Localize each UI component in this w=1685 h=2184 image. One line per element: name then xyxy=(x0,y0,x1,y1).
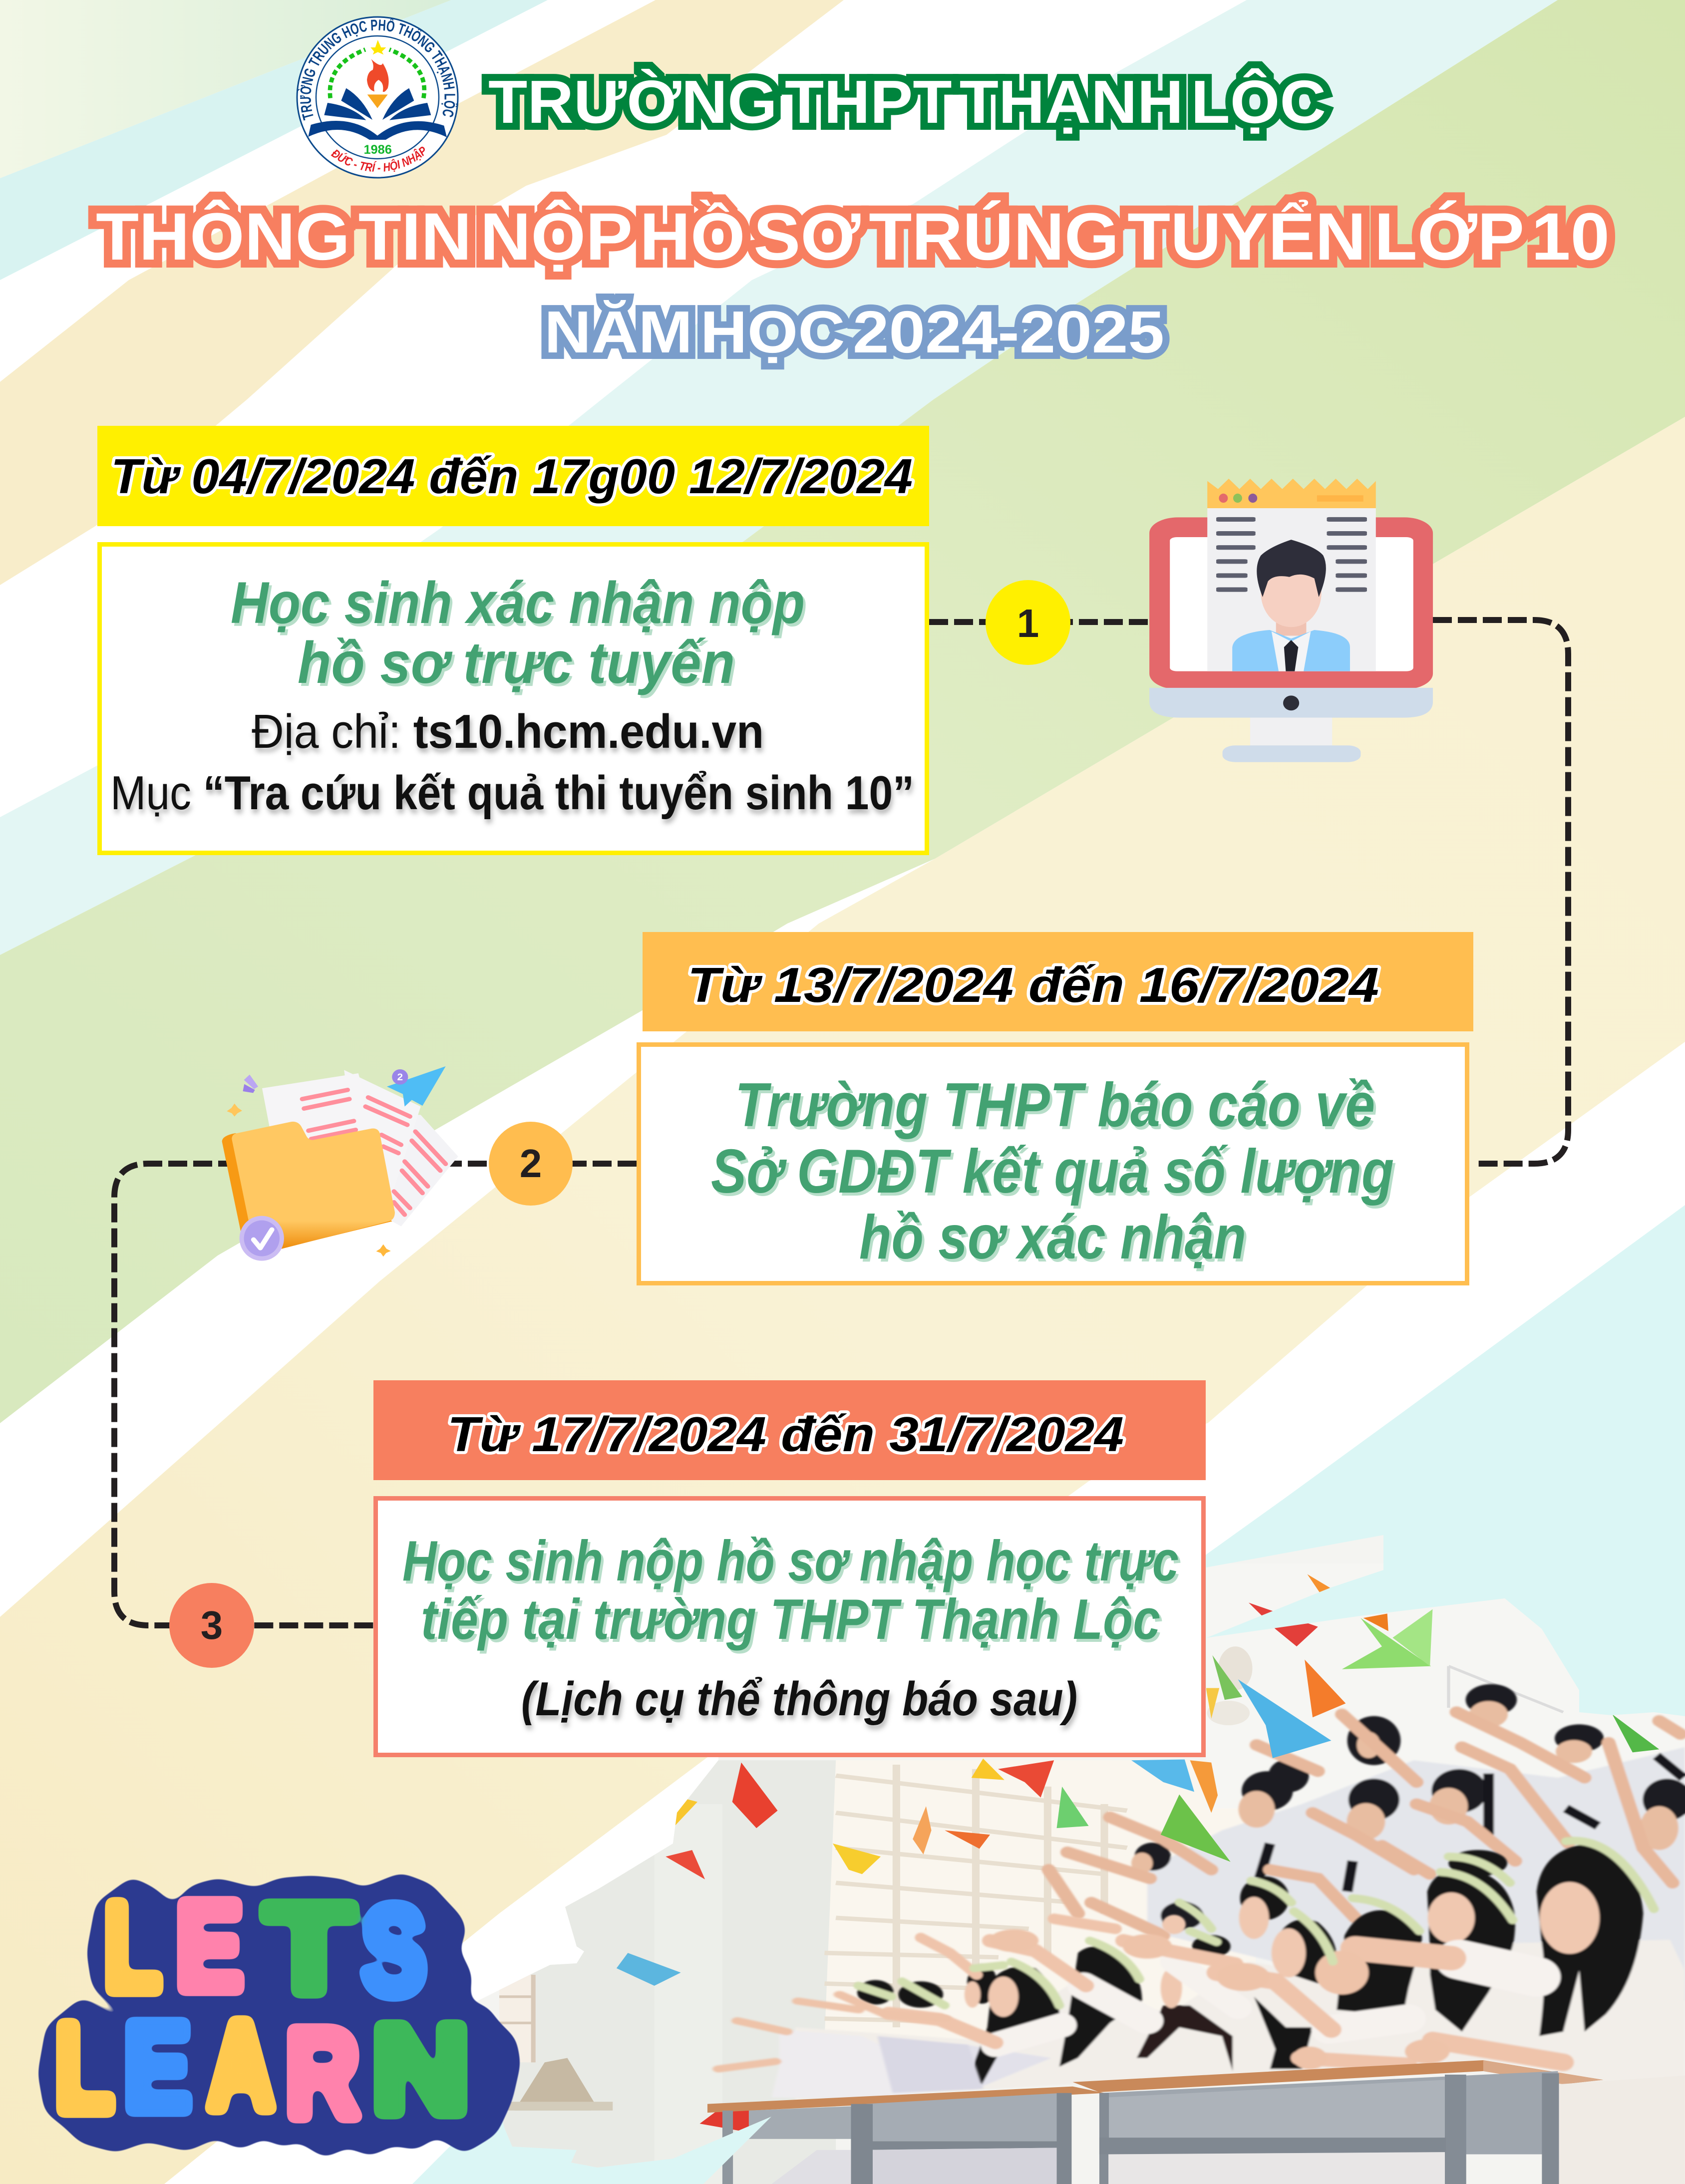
sticker letters: R xyxy=(286,2003,359,2144)
step 2 content box: Sở GDĐT kết quả số lượng xyxy=(711,1137,1394,1206)
step 1 content box xyxy=(100,544,927,853)
sticker letters xyxy=(55,1876,469,2144)
connector: dashed line from step 1 to step 2 xyxy=(1433,620,1568,1164)
title: school name: TRƯỜNG THPT THẠNH LỘC xyxy=(488,68,1326,136)
connector: dashed line 1 xyxy=(929,619,1149,625)
step 1 date header xyxy=(97,426,929,526)
sticker: LETS LEARN xyxy=(38,1873,520,2158)
sticker outline xyxy=(38,1873,520,2158)
sticker letters: E xyxy=(176,1876,243,2016)
step 2 date header: Từ 13/7/2024 đến 16/7/2024 xyxy=(687,957,1379,1012)
front row girls xyxy=(797,1836,1684,2100)
step 2 date header xyxy=(643,932,1473,1031)
photo: students throwing paper planes xyxy=(449,1528,1685,2184)
title: main heading: THÔNG TIN NỘP HỒ SƠ TRÚNG TUYỂN LỚP 10 xyxy=(96,200,1610,274)
sticker letters: A xyxy=(207,1995,275,2136)
step 3 content box: tiếp tại trường THPT Thạnh Lộc xyxy=(421,1588,1160,1651)
sleeves xyxy=(996,1959,1537,2045)
step 1 number badge: 1 xyxy=(1017,601,1039,645)
left students xyxy=(718,1994,984,2100)
school logo xyxy=(297,16,458,179)
logo emblem xyxy=(308,40,447,157)
icon: computer monitor with profile xyxy=(1149,479,1433,762)
step 2 content box xyxy=(639,1044,1467,1283)
flower crowns xyxy=(858,1841,1654,2005)
paper planes xyxy=(833,1574,1659,1874)
step 1 content box: Mục “Tra cứu kết quả thi tuyển sinh 10” xyxy=(110,766,914,820)
icon: folder with documents and paper plane xyxy=(222,1066,458,1261)
step 3 content box: (Lịch cụ thể thông báo sau) xyxy=(521,1672,1077,1726)
left wall xyxy=(499,1760,836,2184)
sticker letters: N xyxy=(372,1999,469,2140)
window xyxy=(824,1761,1128,2030)
logo emblem: 1986 xyxy=(363,143,392,157)
icon: folder with documents and paper plane: 2 xyxy=(397,1072,403,1083)
connector: dashed line from step 2 to step 3 xyxy=(114,1164,637,1625)
sticker letters: L xyxy=(104,1877,161,2017)
title: school year: NĂM HỌC 2024-2025 xyxy=(544,299,1164,365)
step 1 content box: Học sinh xác nhận nộp xyxy=(231,570,805,636)
logo motto: ĐỨC - TRÍ - HỘI NHẬP xyxy=(331,147,425,172)
step 1 number badge xyxy=(986,580,1070,665)
step 2 content box: hồ sơ xác nhận xyxy=(859,1203,1246,1272)
logo ring text: TRƯỜNG TRUNG HỌC PHỔ THÔNG THẠNH LỘC xyxy=(298,19,457,121)
step 3 content box xyxy=(375,1499,1203,1755)
sticker letters: L xyxy=(55,1998,114,2138)
step 3 number badge: 3 xyxy=(201,1603,223,1647)
sticker letters: E xyxy=(124,1997,191,2137)
step 3 date header: Từ 17/7/2024 đến 31/7/2024 xyxy=(447,1407,1124,1462)
ceiling and fan xyxy=(1206,1646,1564,1725)
step 1 content box: hồ sơ trực tuyến xyxy=(298,630,735,696)
step 2 content box: Trường THPT báo cáo về xyxy=(735,1071,1375,1140)
step 3 date header xyxy=(373,1380,1206,1480)
step 2 number badge: 2 xyxy=(520,1141,542,1186)
step 3 number badge xyxy=(169,1583,254,1668)
step 2 number badge xyxy=(489,1122,573,1206)
step 3 content box: Học sinh nộp hồ sơ nhập học trực xyxy=(402,1530,1179,1593)
step 1 date header: Từ 04/7/2024 đến 17g00 12/7/2024 xyxy=(111,449,913,504)
sticker letters: T xyxy=(265,1878,353,2019)
desks xyxy=(707,2060,1685,2184)
sticker letters: S xyxy=(361,1880,426,2021)
step 1 content box: Địa chỉ: ts10.hcm.edu.vn xyxy=(252,705,764,758)
back row boys xyxy=(1048,1684,1685,2001)
